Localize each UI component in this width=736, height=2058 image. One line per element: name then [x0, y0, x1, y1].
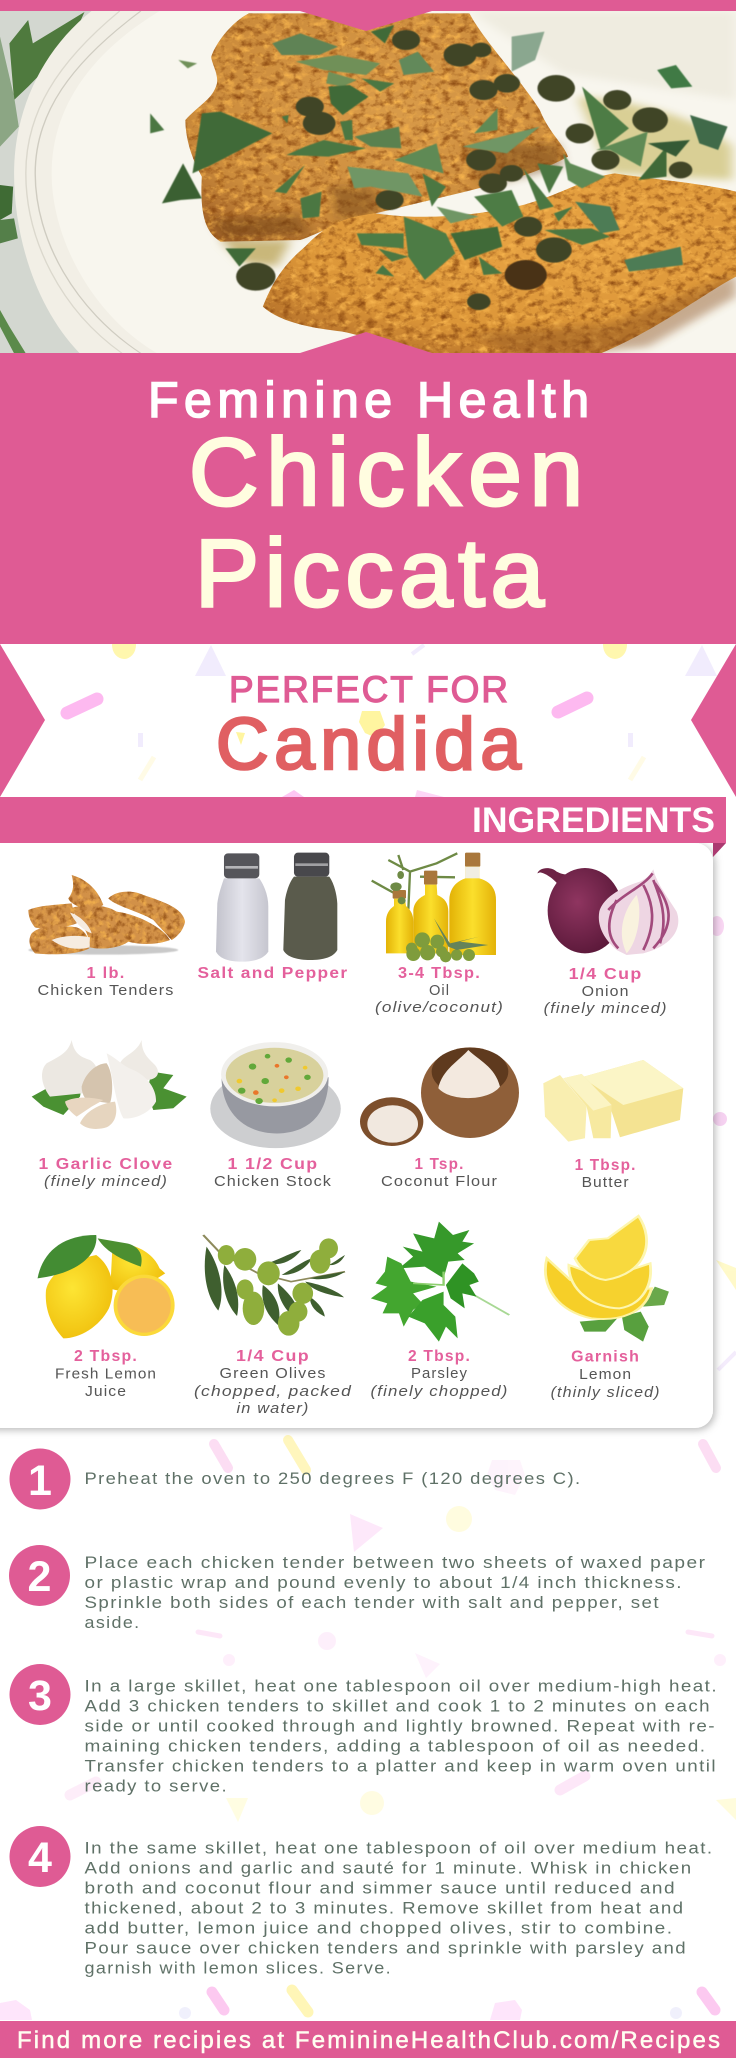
step 3 badge	[10, 1664, 70, 1725]
ingredient: lemons: Juice	[85, 1384, 127, 1400]
top pink band with notch	[0, 0, 736, 31]
title panel	[0, 332, 736, 644]
step 4: add butter, lemon juice and chopped olives, stir to combine.	[84, 1918, 674, 1938]
ingredient: parsley: 2 Tbsp.	[408, 1348, 471, 1365]
ribbon left tail	[0, 644, 45, 797]
subtitle: Feminine Health: Feminine Health	[148, 372, 589, 428]
ingredients card	[0, 797, 726, 1428]
step 2: or plastic wrap and pound evenly to about 1/4 inch thickness.	[84, 1573, 683, 1592]
ingredient: salt and pepper	[198, 853, 348, 982]
ingredient: green olives: 1/4 Cup	[236, 1348, 310, 1365]
hero food photo	[0, 0, 736, 360]
chicken cutlet upper	[185, 13, 568, 242]
step 2: Place each chicken tender between two sheets of waxed paper	[84, 1553, 706, 1572]
capers	[236, 30, 692, 310]
ingredient: garlic	[32, 1040, 187, 1190]
ingredient: onion	[537, 868, 678, 1017]
plate	[14, 11, 736, 353]
page background confetti	[0, 916, 736, 2020]
ingredient: oil bottles: Oil	[429, 983, 450, 999]
step 1: Preheat the oven to 250 degrees F (120 degrees C).	[84, 1469, 582, 1488]
ingredient: coconut flour: 1 Tsp.	[414, 1156, 464, 1173]
ingredient: onion: Onion	[582, 984, 630, 1000]
step 4 badge: 4	[28, 1834, 52, 1882]
ingredient: lemon slices garnish: (thinly sliced)	[551, 1385, 661, 1401]
seared edge on lower cutlet	[469, 273, 736, 353]
title: Chicken: Chicken	[189, 419, 583, 526]
step 2: aside.	[84, 1613, 140, 1632]
step 4 badge	[10, 1826, 70, 1887]
ingredients header bar	[0, 797, 726, 857]
ingredient: green olives: (chopped, packed	[194, 1384, 352, 1400]
step 4: thickened, about 2 to 3 minutes. Remove skillet from heat and	[84, 1898, 684, 1918]
ingredient: green olives	[194, 1235, 352, 1417]
ingredient: lemon slices garnish: Lemon	[579, 1367, 632, 1383]
step 3	[10, 1664, 718, 1796]
step 3: side or until cooked through and lightly browned. Repeat with re-	[84, 1716, 716, 1736]
ingredient: chicken tenders	[28, 875, 185, 955]
step 4: broth and coconut flour and simmer sauce until reduced and	[84, 1878, 676, 1898]
ingredient: green olives: Green Olives	[220, 1366, 326, 1382]
ingredients header bar: INGREDIENTS	[472, 801, 715, 840]
ingredient: chicken stock: Chicken Stock	[214, 1174, 332, 1190]
seared shadows on upper cutlet	[211, 143, 563, 240]
ribbon right tail	[691, 644, 736, 797]
ribbon confetti	[67, 631, 717, 797]
ingredient: oil bottles: (olive/coconut)	[375, 1000, 504, 1016]
ingredient: onion: 1/4 Cup	[569, 966, 643, 983]
ingredient: salt and pepper: Salt and Pepper	[198, 965, 348, 982]
footer bar: Find more recipies at FeminineHealthClub.com/Recipes	[17, 2027, 720, 2054]
ingredient: oil bottles: 3-4 Tbsp.	[398, 965, 481, 982]
ribbon: perfect for candida	[0, 631, 736, 797]
parsley flakes	[150, 25, 728, 280]
ingredient: butter: Butter	[582, 1175, 630, 1191]
ingredient: parsley: (finely chopped)	[370, 1384, 508, 1400]
step 1	[10, 1448, 582, 1510]
ingredient: lemon slices garnish: Garnish	[571, 1348, 640, 1366]
perfect for heading: PERFECT FOR	[229, 669, 508, 710]
step 1 badge: 1	[28, 1457, 52, 1505]
step 2 badge: 2	[28, 1553, 51, 1601]
ingredient: lemons: Fresh Lemon	[55, 1366, 157, 1382]
ingredient: lemon slices garnish	[545, 1216, 669, 1401]
ingredient: chicken stock	[210, 1042, 341, 1190]
ingredient: coconut flour: Coconut Flour	[381, 1174, 498, 1190]
footer bar	[0, 2021, 736, 2058]
step 3: Add 3 chicken tenders to skillet and cook 1 to 2 minutes on each	[84, 1696, 711, 1716]
ingredient: butter	[543, 1060, 683, 1191]
title: Piccata: Piccata	[195, 520, 545, 627]
step 4: garnish with lemon slices. Serve.	[84, 1958, 392, 1978]
ingredient: chicken tenders label	[38, 965, 174, 999]
step 4: Add onions and garlic and sauté for 1 minute. Whisk in chicken	[84, 1858, 692, 1878]
chicken cutlet lower	[263, 173, 736, 353]
ingredient: garlic: 1 Garlic Clove	[38, 1156, 174, 1173]
step 2 badge	[9, 1545, 70, 1606]
ingredient: lemons: 2 Tbsp.	[74, 1348, 138, 1365]
step 3: ready to serve.	[84, 1776, 228, 1796]
ingredient: chicken tenders label: 1 lb.	[86, 965, 126, 982]
ingredient: butter: 1 Tbsp.	[575, 1157, 637, 1174]
ingredient: garlic: (finely minced)	[44, 1174, 168, 1190]
step 4: Pour sauce over chicken tenders and sprinkle with parsley and	[84, 1938, 687, 1958]
ingredient: chicken stock: 1 1/2 Cup	[228, 1156, 318, 1173]
herb garnish left	[0, 12, 84, 353]
step 1 badge	[10, 1448, 70, 1510]
ingredient: coconut flour	[360, 1047, 519, 1190]
step 4	[10, 1826, 714, 1978]
step 4: In the same skillet, heat one tablespoon of oil over medium heat.	[84, 1838, 714, 1858]
ingredient: oil bottles	[372, 853, 504, 1016]
step 3: Transfer chicken tenders to a platter and keep in warm oven until	[84, 1756, 717, 1776]
step 3: maining chicken tenders, adding a tablespoon of oil as needed.	[84, 1736, 706, 1756]
step 3 badge: 3	[28, 1672, 52, 1720]
ingredient: parsley	[370, 1222, 509, 1400]
step 2: Sprinkle both sides of each tender with salt and pepper, set	[84, 1593, 660, 1612]
step 3: In a large skillet, heat one tablespoon oil over medium-high heat.	[84, 1676, 718, 1696]
step 2	[9, 1545, 706, 1632]
ingredient: green olives: in water)	[236, 1401, 310, 1417]
ingredient: lemons	[38, 1235, 175, 1400]
candida heading: Candida	[216, 704, 521, 785]
ingredient: parsley: Parsley	[411, 1366, 468, 1382]
ingredient: onion: (finely minced)	[544, 1001, 668, 1017]
ingredient: chicken tenders label: Chicken Tenders	[38, 983, 174, 999]
